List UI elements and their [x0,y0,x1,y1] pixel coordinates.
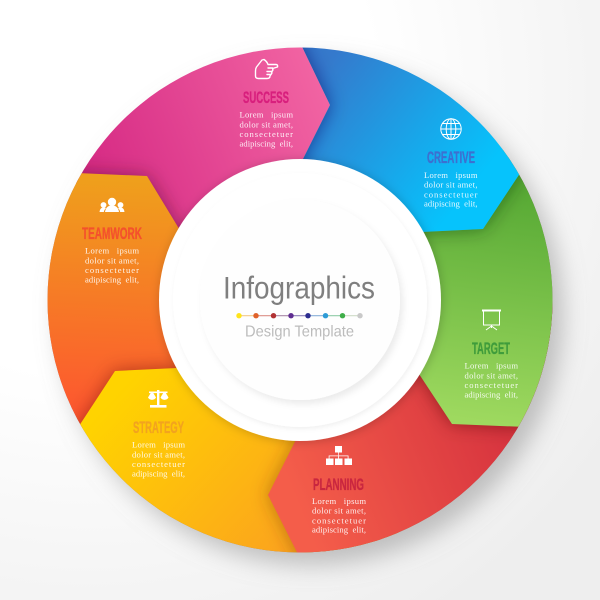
body: creative: consectetuer [424,190,478,200]
body: teamwork: Lorem ipsum [85,246,139,256]
segment: green target [420,150,552,427]
ring drop shadow [59,61,563,565]
center subtitle: Design Template [245,324,354,340]
panel: success [240,60,293,148]
panel: target [464,310,518,400]
segment: blue creative [302,48,519,232]
dotted colour line [236,313,363,318]
shadow: orange on pink [48,162,186,429]
body: strategy: dolor sit amet, [132,450,185,460]
body: strategy: Lorem ipsum [132,440,185,450]
body: target [464,360,518,400]
center badge [159,159,441,441]
icon: scales [148,390,168,408]
body: planning: Lorem ipsum [312,496,366,506]
heading: strategy: STRATEGY [133,419,184,437]
icon: pointing hand [256,60,278,78]
panel: planning [312,446,366,534]
body: success: consectetuer [240,129,293,139]
panel: strategy [132,390,185,478]
body: teamwork: adipiscing elit, [85,274,139,284]
segmented ring [48,48,552,552]
body: target: dolor sit amet, [464,370,518,380]
body: success [240,110,293,148]
heading: success: SUCCESS [243,89,289,107]
shadow: yellow on orange [74,358,394,552]
body: target: Lorem ipsum [464,360,518,370]
segment: yellow strategy [80,368,400,552]
shadow: red on yellow [260,311,552,552]
body: teamwork: dolor sit amet, [85,256,139,266]
icon: team [100,198,124,212]
shadow: green on red [414,146,552,436]
shadow: pink on blue [302,48,338,160]
body: planning: adipiscing elit, [312,524,366,534]
panel: teamwork [82,198,142,284]
icon: org chart [326,446,352,465]
body: creative: adipiscing elit, [424,198,478,208]
segment: red planning [268,304,552,552]
body: planning: dolor sit amet, [312,506,366,516]
heading: planning: PLANNING [313,476,364,494]
heading: creative: CREATIVE [427,149,475,167]
body: success: Lorem ipsum [240,110,293,120]
body: strategy: consectetuer [132,459,185,469]
body: teamwork: consectetuer [85,265,139,275]
body: creative: dolor sit amet, [424,180,478,190]
panel: creative [424,119,478,208]
center title: Infographics [223,270,375,306]
shadow: blue on green [424,174,525,244]
body: planning: consectetuer [312,516,366,526]
body: planning [312,496,366,534]
body: creative: Lorem ipsum [424,170,478,180]
body: teamwork [85,246,139,284]
body: creative [424,170,478,208]
segment: pink success [76,48,330,228]
icon: globe [441,119,461,139]
body: target: adipiscing elit, [464,390,518,400]
body: strategy [132,440,185,478]
icon: presentation board [482,310,501,330]
heading: target: TARGET [472,340,510,358]
body: success: adipiscing elit, [240,138,293,148]
heading: teamwork: TEAMWORK [82,225,142,243]
body: strategy: adipiscing elit, [132,468,185,478]
body: success: dolor sit amet, [240,120,293,130]
body: target: consectetuer [464,380,518,390]
segment: orange teamwork [48,173,179,428]
